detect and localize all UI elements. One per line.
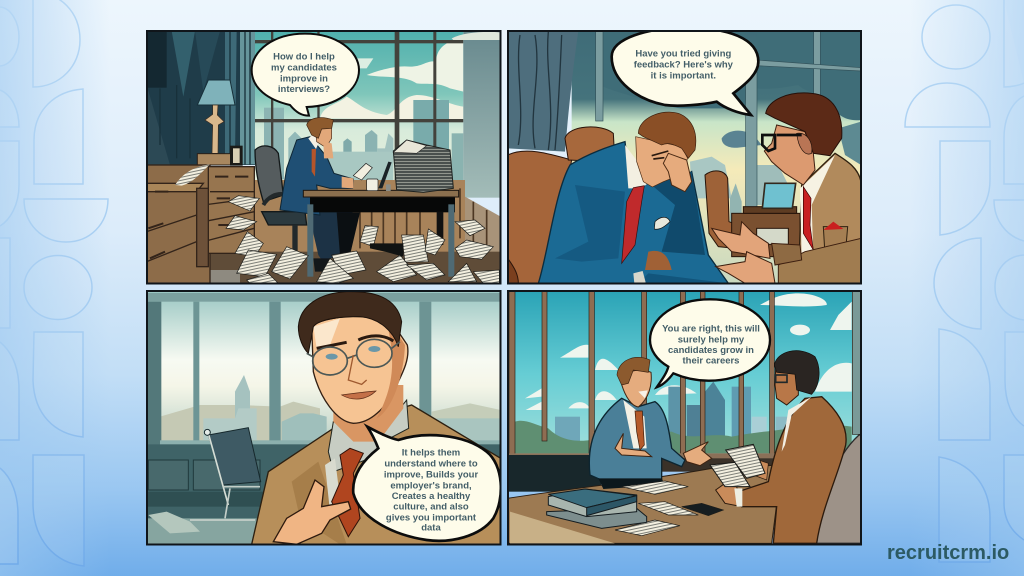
curtain (508, 31, 578, 152)
stressed man (538, 112, 728, 283)
table front edge (510, 512, 615, 543)
dark curtain wall (147, 31, 255, 165)
logo wordmark: recruitcrm.io (887, 542, 1009, 564)
right chair (817, 435, 861, 543)
bubble text: You are right, this will (662, 324, 760, 335)
binders (547, 489, 647, 528)
panel 1 border (147, 31, 500, 284)
window sky (147, 291, 501, 444)
clouds (525, 293, 852, 410)
filing cabinets (147, 165, 254, 283)
speech bubble 1 (252, 34, 359, 116)
paper on cabinet (175, 164, 210, 186)
scattered papers (226, 196, 499, 283)
window sky (508, 291, 861, 458)
background pattern: right (905, 0, 1024, 562)
right man with papers (716, 351, 846, 543)
panel 2: colleague advising a stressed recruiter (508, 28, 861, 283)
desk (303, 190, 459, 277)
hills and skyline (160, 375, 501, 442)
speech bubble 3 (353, 427, 501, 541)
window frame (147, 293, 501, 445)
lamp (197, 80, 235, 153)
small chair, desk and monitor (705, 171, 800, 257)
documents and phone on table (615, 481, 723, 536)
panel 3: colleague explaining benefits (147, 291, 501, 544)
stack of papers (393, 140, 453, 192)
bubble text: employer's brand, (390, 480, 472, 491)
bubble text: improve in (280, 73, 328, 84)
main character (252, 292, 501, 544)
bubble text: understand where to (384, 458, 478, 469)
skyline (555, 382, 791, 442)
bubble text: feedback? Here's why (634, 59, 734, 70)
books and picture frame (197, 146, 243, 166)
window sky (572, 31, 861, 283)
dark clouds and skyline (674, 100, 860, 222)
bubble text: surely help my (678, 334, 745, 345)
table (508, 465, 782, 543)
bubble text: It helps them (402, 448, 460, 459)
lower cabinet (147, 444, 501, 544)
panel 4: two colleagues agreeing at a table (508, 291, 861, 543)
dark wall and sill (508, 453, 861, 492)
wood wainscot and floor (197, 180, 501, 283)
gesturing hands (712, 222, 861, 283)
bubble text: their careers (683, 356, 739, 367)
panel 1: recruiter thinking at a messy desk (147, 31, 501, 283)
pointing hand (273, 480, 351, 544)
office chair (255, 146, 307, 252)
speech bubble 4 (650, 299, 770, 387)
bubble text: Have you tried giving (635, 49, 731, 60)
bubble text: improve, Builds your (384, 469, 478, 480)
dark briefcase (370, 243, 403, 257)
bubble text: gives you important (386, 512, 477, 523)
bubble text: my candidates (271, 62, 337, 73)
man at desk (280, 118, 372, 272)
bubble text: data (421, 522, 441, 533)
office chair (190, 428, 261, 520)
bubble text: interviews? (278, 84, 330, 95)
right wall (452, 32, 500, 252)
bubble text: culture, and also (393, 502, 469, 513)
speech bubble 2 (612, 28, 758, 115)
background pattern: left (0, 0, 108, 566)
left man smiling (589, 357, 712, 489)
panel 4 border (508, 291, 861, 544)
window frame (596, 31, 861, 212)
window view (255, 31, 463, 181)
panel 3 border (147, 291, 500, 544)
bubble text: How do I help (273, 51, 335, 62)
advising man (761, 92, 860, 253)
window posts (509, 291, 861, 454)
window frame (255, 31, 463, 181)
laptop and mug (367, 162, 392, 191)
bubble text: Creates a healthy (392, 491, 471, 502)
panel 2 border (508, 31, 861, 284)
bubble text: candidates grow in (668, 345, 754, 356)
bubble text: it is important. (651, 70, 716, 81)
tree line (515, 421, 852, 453)
papers in hand (710, 444, 765, 487)
armchair (508, 127, 614, 283)
